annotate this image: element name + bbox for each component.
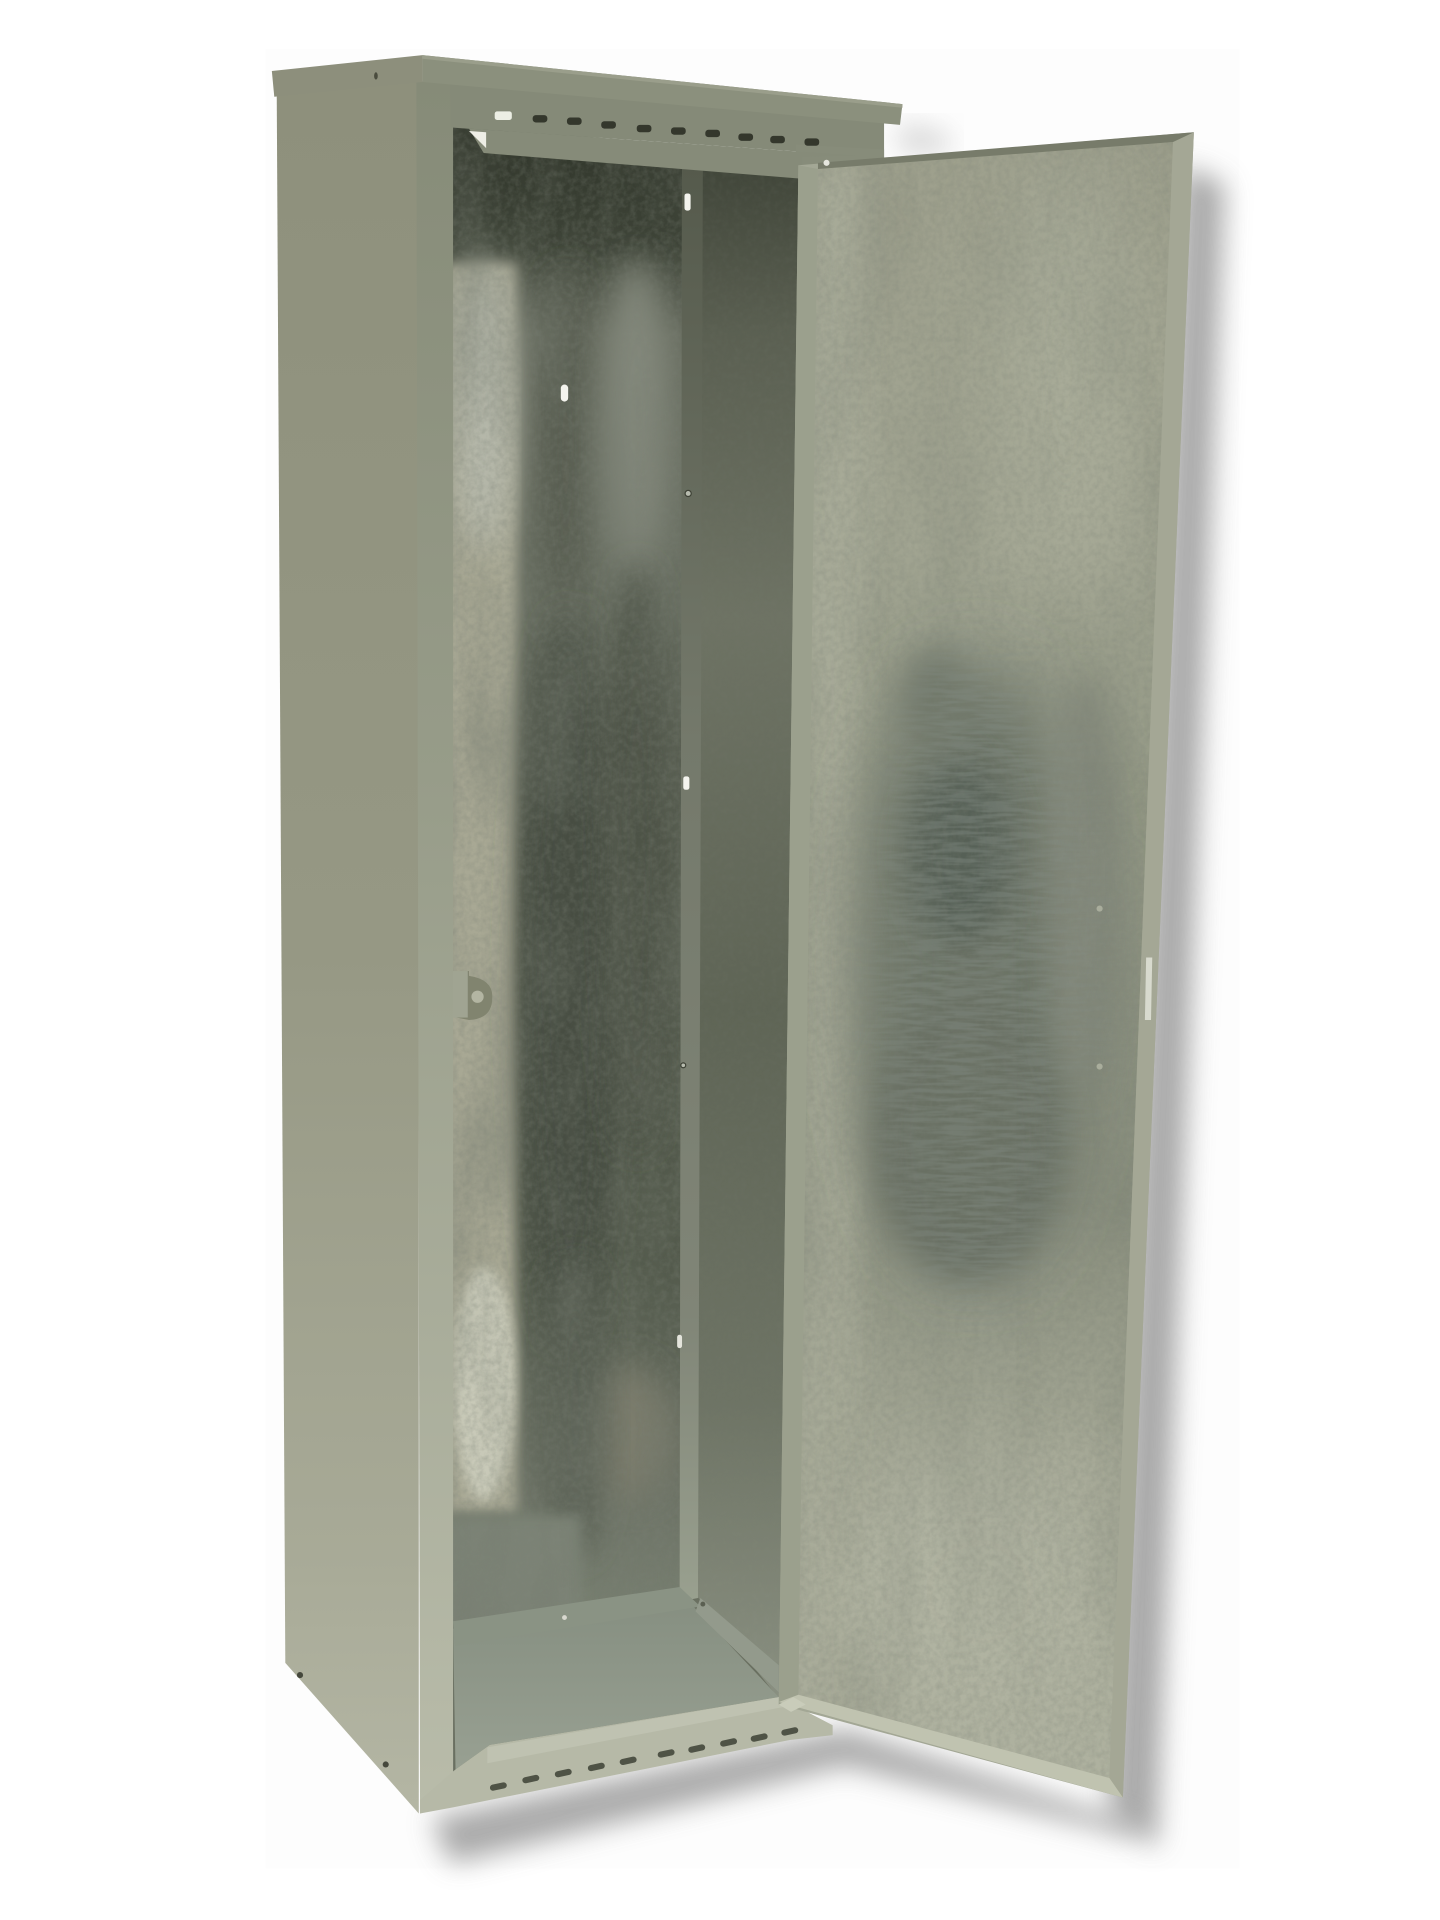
roof screw [374, 72, 378, 80]
back floor lip [453, 1587, 700, 1646]
door bottom flange [779, 1695, 1123, 1798]
interior fill behind panels [451, 122, 808, 1776]
rib screw 1 [685, 490, 691, 497]
back panel hole [561, 384, 568, 402]
vertical rib [677, 165, 703, 1602]
floor screw [562, 1615, 567, 1620]
photo: open metal cabinet [272, 55, 1240, 1876]
cabinet floor [453, 1587, 779, 1769]
cabinet side face [277, 81, 419, 1813]
interior right wall [698, 170, 798, 1697]
photo backdrop [266, 49, 1239, 1869]
rail slots [489, 1727, 799, 1791]
wall bracket [451, 971, 492, 1020]
cabinet front frame [416, 81, 884, 1813]
rib slot lower [677, 1335, 682, 1348]
top hinge [823, 160, 830, 166]
door screw upper [1097, 906, 1103, 912]
door latch [1145, 958, 1152, 1020]
top rail [451, 81, 884, 159]
open door [779, 129, 1194, 1798]
bracket tab [451, 971, 468, 1018]
right post above door [796, 144, 884, 174]
door left edge [779, 165, 818, 1704]
door top flange [818, 132, 1194, 169]
shadow: roof right [900, 122, 949, 153]
rib screw 2 [681, 1063, 686, 1068]
shadow: door right [1108, 165, 1224, 1849]
shadow: under cabinet [431, 1729, 1139, 1864]
cast shadows [431, 122, 1224, 1864]
door inner panel [796, 129, 1188, 1794]
rib slot middle [683, 776, 689, 790]
bottom hinge [779, 1697, 806, 1712]
bracket hole [471, 991, 484, 1003]
interior back panel [453, 128, 682, 1628]
door screw lower [1097, 1063, 1103, 1070]
screw: side lower left [297, 1672, 303, 1678]
door outer body [779, 132, 1194, 1798]
roof [272, 55, 902, 125]
floor wall seam [696, 1598, 779, 1692]
bottom rail [420, 1697, 833, 1813]
rib slot top [684, 193, 691, 211]
shelf notch [469, 131, 486, 148]
corner screw [700, 1602, 705, 1607]
top inner shelf [469, 111, 856, 179]
top rail slots [495, 111, 819, 146]
screw: side lower right [383, 1761, 389, 1768]
door right flange [1109, 132, 1194, 1798]
